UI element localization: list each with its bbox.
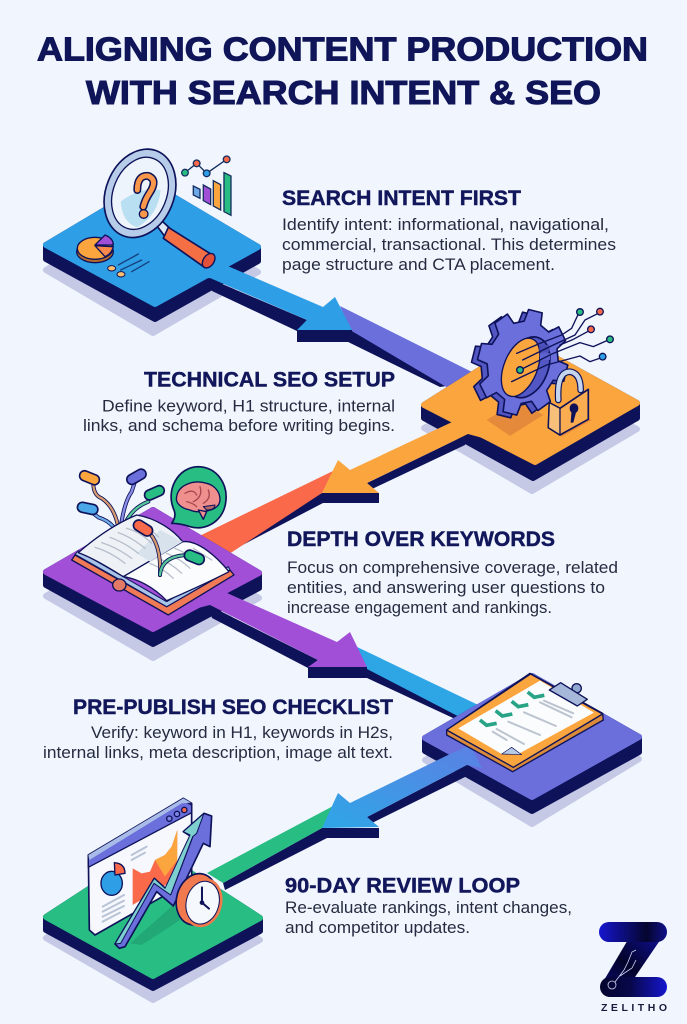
- panel shadows: [46, 208, 639, 1000]
- connector shaft: step 1 to step 2: [340, 306, 492, 395]
- icon: open book with branching ideas and brain bubble: [72, 467, 234, 615]
- title: ALIGNING CONTENT PRODUCTION: [37, 32, 648, 68]
- text block: pre-publish seo checklist: Verify: keyword in H1, keywords in H2s,: [91, 723, 393, 742]
- text block: technical seo setup: [83, 368, 395, 435]
- logo: zelitho: ZELITHO: [601, 1002, 667, 1014]
- text block: pre-publish seo checklist: PRE-PUBLISH SEO CHECKLIST: [73, 695, 393, 719]
- text block: pre-publish seo checklist: [43, 695, 393, 762]
- text block: 90-day review loop: Re-evaluate rankings, intent changes,: [285, 898, 572, 917]
- text block: depth over keywords: [287, 527, 618, 617]
- title: [37, 32, 648, 112]
- text block: search intent first: Identify intent: informational, navigational,: [282, 215, 609, 234]
- text block: 90-day review loop: [285, 874, 572, 937]
- text block: depth over keywords: Focus on comprehensive coverage, related: [287, 558, 618, 577]
- icon: magnifier with question mark and charts: [77, 138, 231, 277]
- text block: search intent first: page structure and CTA placement.: [282, 255, 555, 274]
- panel: step 5 platform: [46, 848, 260, 988]
- text block: depth over keywords: increase engagement and rankings.: [287, 598, 552, 617]
- text block: technical seo setup: Define keyword, H1 structure, internal: [102, 396, 395, 416]
- panel: step 4 platform and arrow: [322, 676, 639, 838]
- text block: search intent first: SEARCH INTENT FIRST: [282, 186, 521, 210]
- connector shaft: step 2 to step 3: [185, 470, 335, 560]
- panel: step 3 platform and arrow: [46, 510, 367, 678]
- text block: search intent first: commercial, transactional. This determines: [282, 235, 616, 254]
- text block: technical seo setup: TECHNICAL SEO SETUP: [144, 368, 395, 392]
- panel: step 1 platform and arrow: [46, 183, 352, 342]
- panel: step 2 platform and arrow: [322, 341, 637, 503]
- text block: search intent first: [282, 186, 616, 274]
- text block: depth over keywords: entities, and answering user questions to: [287, 578, 605, 597]
- text block: technical seo setup: links, and schema before writing begins.: [83, 416, 395, 435]
- text block: pre-publish seo checklist: internal links, meta description, image alt text.: [43, 743, 393, 762]
- icon: analytics window, growth arrow and clock: [88, 798, 226, 948]
- title: WITH SEARCH INTENT & SEO: [86, 75, 601, 112]
- connector shaft: step 4 to step 5: [207, 805, 335, 890]
- icon: clipboard checklist: [447, 673, 603, 772]
- connector shaft: step 3 to step 4: [355, 646, 495, 725]
- icon: gear with circuit lines and padlock: [461, 300, 613, 437]
- text block: depth over keywords: DEPTH OVER KEYWORDS: [287, 527, 555, 551]
- text block: 90-day review loop: and competitor updates.: [285, 918, 470, 937]
- text block: 90-day review loop: 90-DAY REVIEW LOOP: [285, 874, 520, 898]
- logo: zelitho: [599, 922, 667, 1014]
